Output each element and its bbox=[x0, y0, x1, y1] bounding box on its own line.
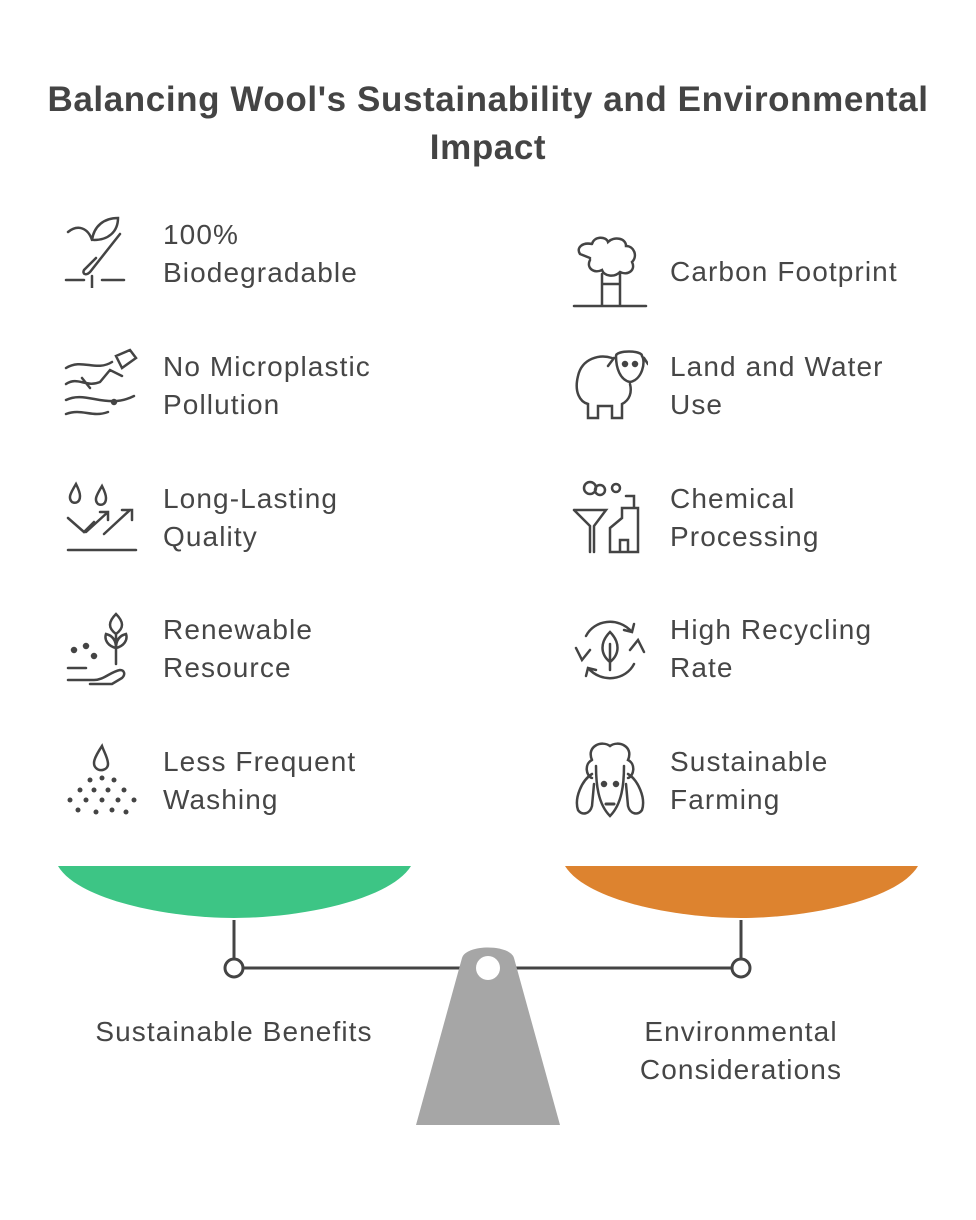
text: Sustainable Farming: Farming bbox=[670, 784, 780, 815]
title: Balancing Wool's Sustainability and Environmental bbox=[47, 80, 929, 119]
icon: recycle leaf bbox=[574, 620, 646, 680]
text: Less Frequent Washing: Washing bbox=[163, 784, 279, 815]
fulcrum bbox=[416, 948, 560, 1125]
text: Land and Water Use: Use bbox=[670, 389, 723, 420]
text: Less Frequent Washing bbox=[163, 746, 356, 815]
label: Sustainable Benefits: Sustainable Benefits bbox=[95, 1016, 373, 1047]
text: Chemical Processing bbox=[670, 483, 820, 552]
label: Environmental Considerations: Considerations bbox=[640, 1054, 842, 1085]
text: Renewable Resource: Renewable bbox=[163, 614, 313, 645]
text: Chemical Processing: Chemical bbox=[670, 483, 796, 514]
orange pan bbox=[565, 866, 918, 918]
text: Long-Lasting Quality bbox=[163, 483, 338, 552]
icon: sheep on post bbox=[572, 236, 648, 308]
label: Environmental Considerations: Environmental bbox=[644, 1016, 838, 1047]
title: Impact bbox=[430, 128, 546, 167]
text: High Recycling Rate: Rate bbox=[670, 652, 734, 683]
icon: sheep face bbox=[576, 742, 644, 818]
text: 100% Biodegradable: 100% bbox=[163, 219, 239, 250]
green pan bbox=[58, 866, 411, 918]
text: Less Frequent Washing: Less Frequent bbox=[163, 746, 356, 777]
text: Renewable Resource bbox=[163, 614, 313, 683]
text: 100% Biodegradable: Biodegradable bbox=[163, 257, 358, 288]
icon: factory bbox=[572, 480, 640, 554]
text: Renewable Resource: Resource bbox=[163, 652, 292, 683]
text: High Recycling Rate bbox=[670, 614, 872, 683]
text: No Microplastic Pollution: Pollution bbox=[163, 389, 280, 420]
text: Land and Water Use bbox=[670, 351, 884, 420]
text: Chemical Processing: Processing bbox=[670, 521, 820, 552]
icon: plant hand bbox=[64, 216, 126, 288]
text: No Microplastic Pollution: No Microplastic bbox=[163, 351, 371, 382]
icon: sheep bbox=[575, 350, 648, 420]
icon: waves bbox=[64, 348, 138, 416]
icon: drop dots bbox=[68, 743, 136, 814]
text: Sustainable Farming bbox=[670, 746, 828, 815]
text: Long-Lasting Quality: Long-Lasting bbox=[163, 483, 338, 514]
beam bbox=[225, 920, 750, 977]
text: Sustainable Farming: Sustainable bbox=[670, 746, 828, 777]
text: No Microplastic Pollution bbox=[163, 351, 371, 420]
title bbox=[47, 80, 929, 167]
text: High Recycling Rate: High Recycling bbox=[670, 614, 872, 645]
label: Environmental Considerations bbox=[640, 1016, 842, 1085]
text: 100% Biodegradable bbox=[163, 219, 358, 288]
text: Long-Lasting Quality: Quality bbox=[163, 521, 258, 552]
icon: wheat hand bbox=[66, 612, 128, 686]
text: Carbon Footprint: Carbon Footprint bbox=[670, 256, 898, 287]
text: Land and Water Use: Land and Water bbox=[670, 351, 884, 382]
icon: drops arrows bbox=[66, 482, 138, 552]
